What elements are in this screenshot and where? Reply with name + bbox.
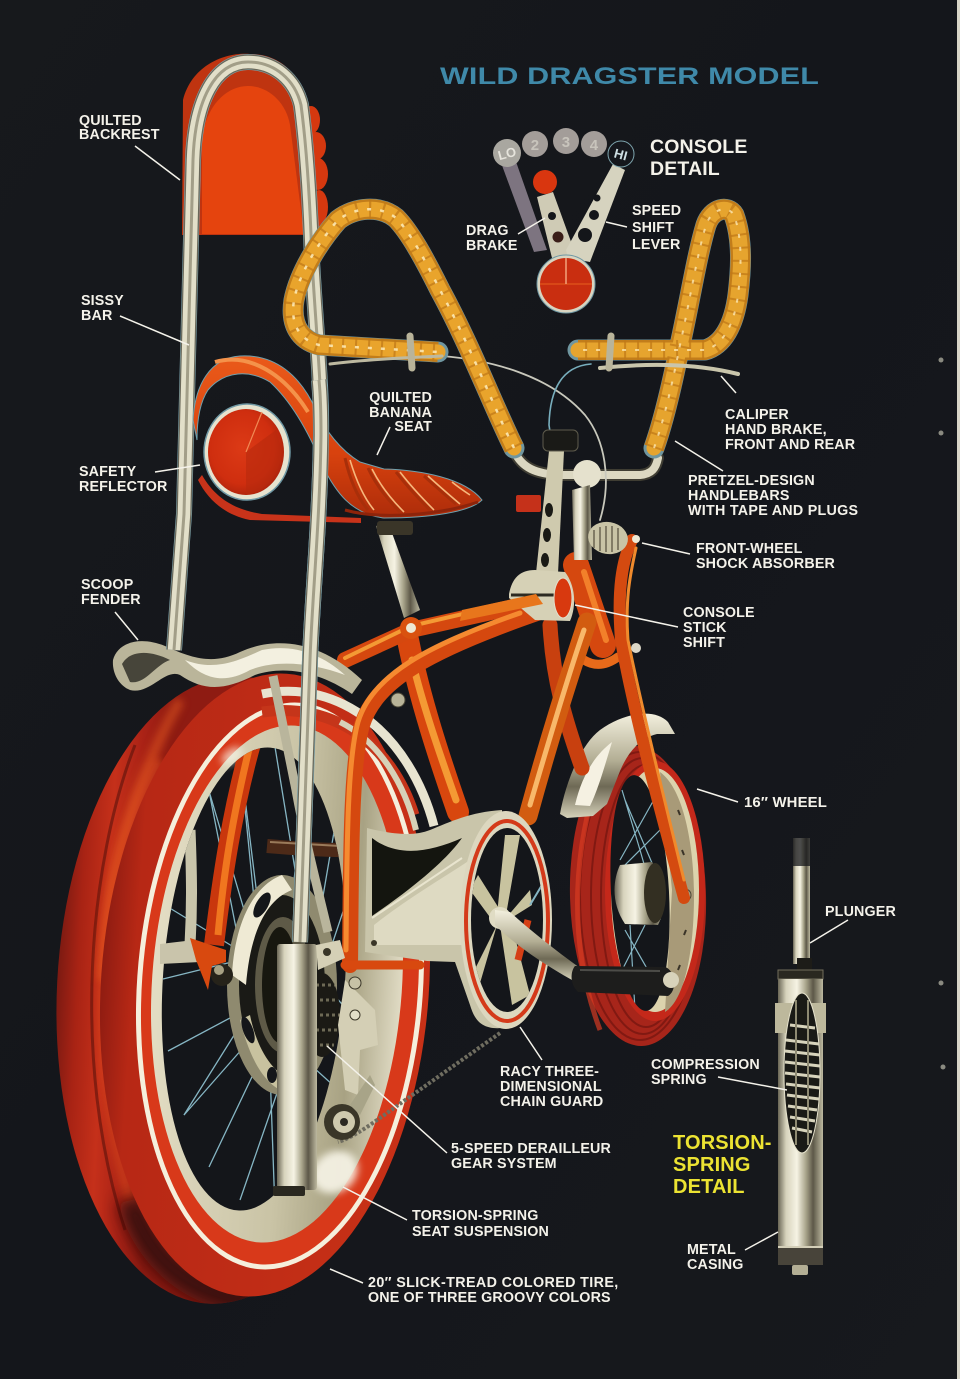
stay bolt xyxy=(391,693,405,707)
heading: torsion-spring detail: SPRING xyxy=(673,1154,751,1176)
whitewall stripe xyxy=(118,693,442,1279)
handlebars xyxy=(293,209,741,520)
seat clamp xyxy=(377,521,413,535)
gear buttons: 2 xyxy=(531,137,539,154)
label: 16 inch wheel: 16″ WHEEL xyxy=(744,795,827,811)
rear spokes xyxy=(163,748,342,1200)
heading: torsion-spring detail: TORSION- xyxy=(673,1132,772,1154)
front rim xyxy=(611,768,699,1012)
crank arm xyxy=(495,910,580,980)
gear buttons: 4 xyxy=(590,137,599,154)
label: speed shift lever: LEVER xyxy=(632,237,681,253)
label: compression spring: SPRING xyxy=(651,1072,707,1088)
bike frame xyxy=(345,535,684,965)
label: pretzel handlebars: WITH TAPE AND PLUGS xyxy=(688,503,858,519)
label: drag brake: DRAG xyxy=(466,223,509,239)
seat stay chrome strut xyxy=(273,676,328,932)
label: safety reflector: SAFETY xyxy=(79,464,137,480)
front spokes xyxy=(620,790,660,1004)
label: metal casing: METAL xyxy=(687,1242,736,1258)
label: sissy bar: BAR xyxy=(81,308,113,324)
shock absorber xyxy=(586,519,630,557)
label: console stick shift: SHIFT xyxy=(683,635,725,651)
rear tire face xyxy=(80,662,450,1308)
rear gear cluster xyxy=(304,973,340,1057)
down tube xyxy=(528,622,587,816)
label: safety reflector: REFLECTOR xyxy=(79,479,168,495)
torsion spring detail xyxy=(775,838,826,1275)
label: pretzel handlebars: HANDLEBARS xyxy=(688,488,790,504)
label: console stick shift: CONSOLE xyxy=(683,605,755,621)
rear tire tread xyxy=(56,677,254,1304)
speed shift lever xyxy=(537,192,574,262)
front hub xyxy=(615,862,664,925)
drag brake lever xyxy=(500,156,547,252)
front tire xyxy=(566,744,710,1048)
label: metal casing: CASING xyxy=(687,1257,744,1273)
heading: console detail: DETAIL xyxy=(650,158,720,180)
rear rim xyxy=(134,717,420,1251)
label: speed shift lever: SPEED xyxy=(632,203,681,219)
label: scoop fender: FENDER xyxy=(81,592,141,608)
front fender xyxy=(560,714,675,818)
label: drag brake: BRAKE xyxy=(466,238,518,254)
label: compression spring: COMPRESSION xyxy=(651,1057,760,1073)
label: speed shift lever: SHIFT xyxy=(632,220,674,236)
right sissy bar front pass xyxy=(300,380,321,942)
plunger xyxy=(793,838,810,964)
grip clamps xyxy=(410,336,412,368)
top tube xyxy=(345,600,545,660)
label: seat suspension: TORSION-SPRING xyxy=(412,1208,539,1224)
console detail xyxy=(493,128,634,313)
rear sprocket disc xyxy=(211,875,337,1095)
gear buttons: LO xyxy=(496,144,518,163)
backrest panel xyxy=(202,86,304,234)
scoop fender xyxy=(113,641,362,694)
leader lines xyxy=(115,146,848,1283)
spring cylinder xyxy=(273,940,345,1196)
gear buttons: HI xyxy=(613,146,629,163)
label: chain guard: CHAIN GUARD xyxy=(500,1094,603,1110)
label: seat suspension: SEAT SUSPENSION xyxy=(412,1224,549,1240)
label: quilted banana seat: BANANA xyxy=(369,405,432,421)
lower stay xyxy=(345,960,420,970)
label: shock absorber: FRONT-WHEEL xyxy=(696,541,803,557)
backrest pad xyxy=(182,54,328,235)
title: WILD DRAGSTER MODEL xyxy=(440,63,819,90)
label: quilted banana seat: SEAT xyxy=(394,419,432,435)
console reflector xyxy=(537,255,595,313)
safety reflector xyxy=(204,404,290,500)
left chrome bar xyxy=(514,451,658,475)
label: derailleur: GEAR SYSTEM xyxy=(451,1156,557,1172)
front bracket xyxy=(584,657,618,664)
label: sissy bar: SISSY xyxy=(81,293,124,309)
banana seat xyxy=(193,356,482,523)
pedal xyxy=(572,966,674,996)
gear buttons xyxy=(493,128,634,167)
seat lug bolt xyxy=(400,617,422,639)
label: caliper hand brake: FRONT AND REAR xyxy=(725,437,856,453)
label: plunger: PLUNGER xyxy=(825,904,896,920)
head tube xyxy=(576,565,603,645)
chain guard xyxy=(365,810,679,1029)
label: chain guard: RACY THREE- xyxy=(500,1064,599,1080)
handlebar stem xyxy=(460,430,630,621)
rear brace and stay xyxy=(190,740,345,945)
sissy bar xyxy=(174,54,328,942)
label: caliper hand brake: HAND BRAKE, xyxy=(725,422,827,438)
console clamp xyxy=(509,570,574,621)
derailleur xyxy=(324,977,378,1140)
drag brake knob xyxy=(533,170,557,194)
spring window xyxy=(784,993,820,1153)
heading: console detail: CONSOLE xyxy=(650,136,747,158)
label: quilted backrest: QUILTED xyxy=(79,113,142,129)
seat post xyxy=(376,522,420,618)
cables xyxy=(442,356,606,520)
label: 20 inch tire: 20″ SLICK-TREAD COLORED TIRE, xyxy=(368,1275,619,1291)
label: shock absorber: SHOCK ABSORBER xyxy=(696,556,836,572)
right grip and loop tape xyxy=(578,209,741,448)
chain xyxy=(338,1033,500,1142)
rear fender arc xyxy=(262,691,434,830)
heading: torsion-spring detail: DETAIL xyxy=(673,1176,745,1198)
curved chain stay xyxy=(350,612,540,965)
label: caliper hand brake: CALIPER xyxy=(725,407,789,423)
label: quilted banana seat: QUILTED xyxy=(369,390,432,406)
label: pretzel handlebars: PRETZEL-DESIGN xyxy=(688,473,815,489)
seat tube xyxy=(408,640,458,812)
label: scoop fender: SCOOP xyxy=(81,577,134,593)
front wheel xyxy=(560,714,710,1048)
right hand brake lever xyxy=(600,365,738,374)
rear wheel xyxy=(56,674,430,1304)
thin down tube xyxy=(550,625,582,768)
chainring xyxy=(460,811,552,1029)
left grip and loop tape xyxy=(293,209,514,448)
label: chain guard: DIMENSIONAL xyxy=(500,1079,602,1095)
label: 20 inch tire: ONE OF THREE GROOVY COLORS xyxy=(368,1290,611,1306)
label: console stick shift: STICK xyxy=(683,620,727,636)
label: quilted backrest: BACKREST xyxy=(79,127,160,143)
gear buttons: 3 xyxy=(562,134,570,151)
metal casing xyxy=(778,979,823,1247)
label: derailleur: 5-SPEED DERAILLEUR xyxy=(451,1141,612,1157)
front fork xyxy=(620,540,684,898)
